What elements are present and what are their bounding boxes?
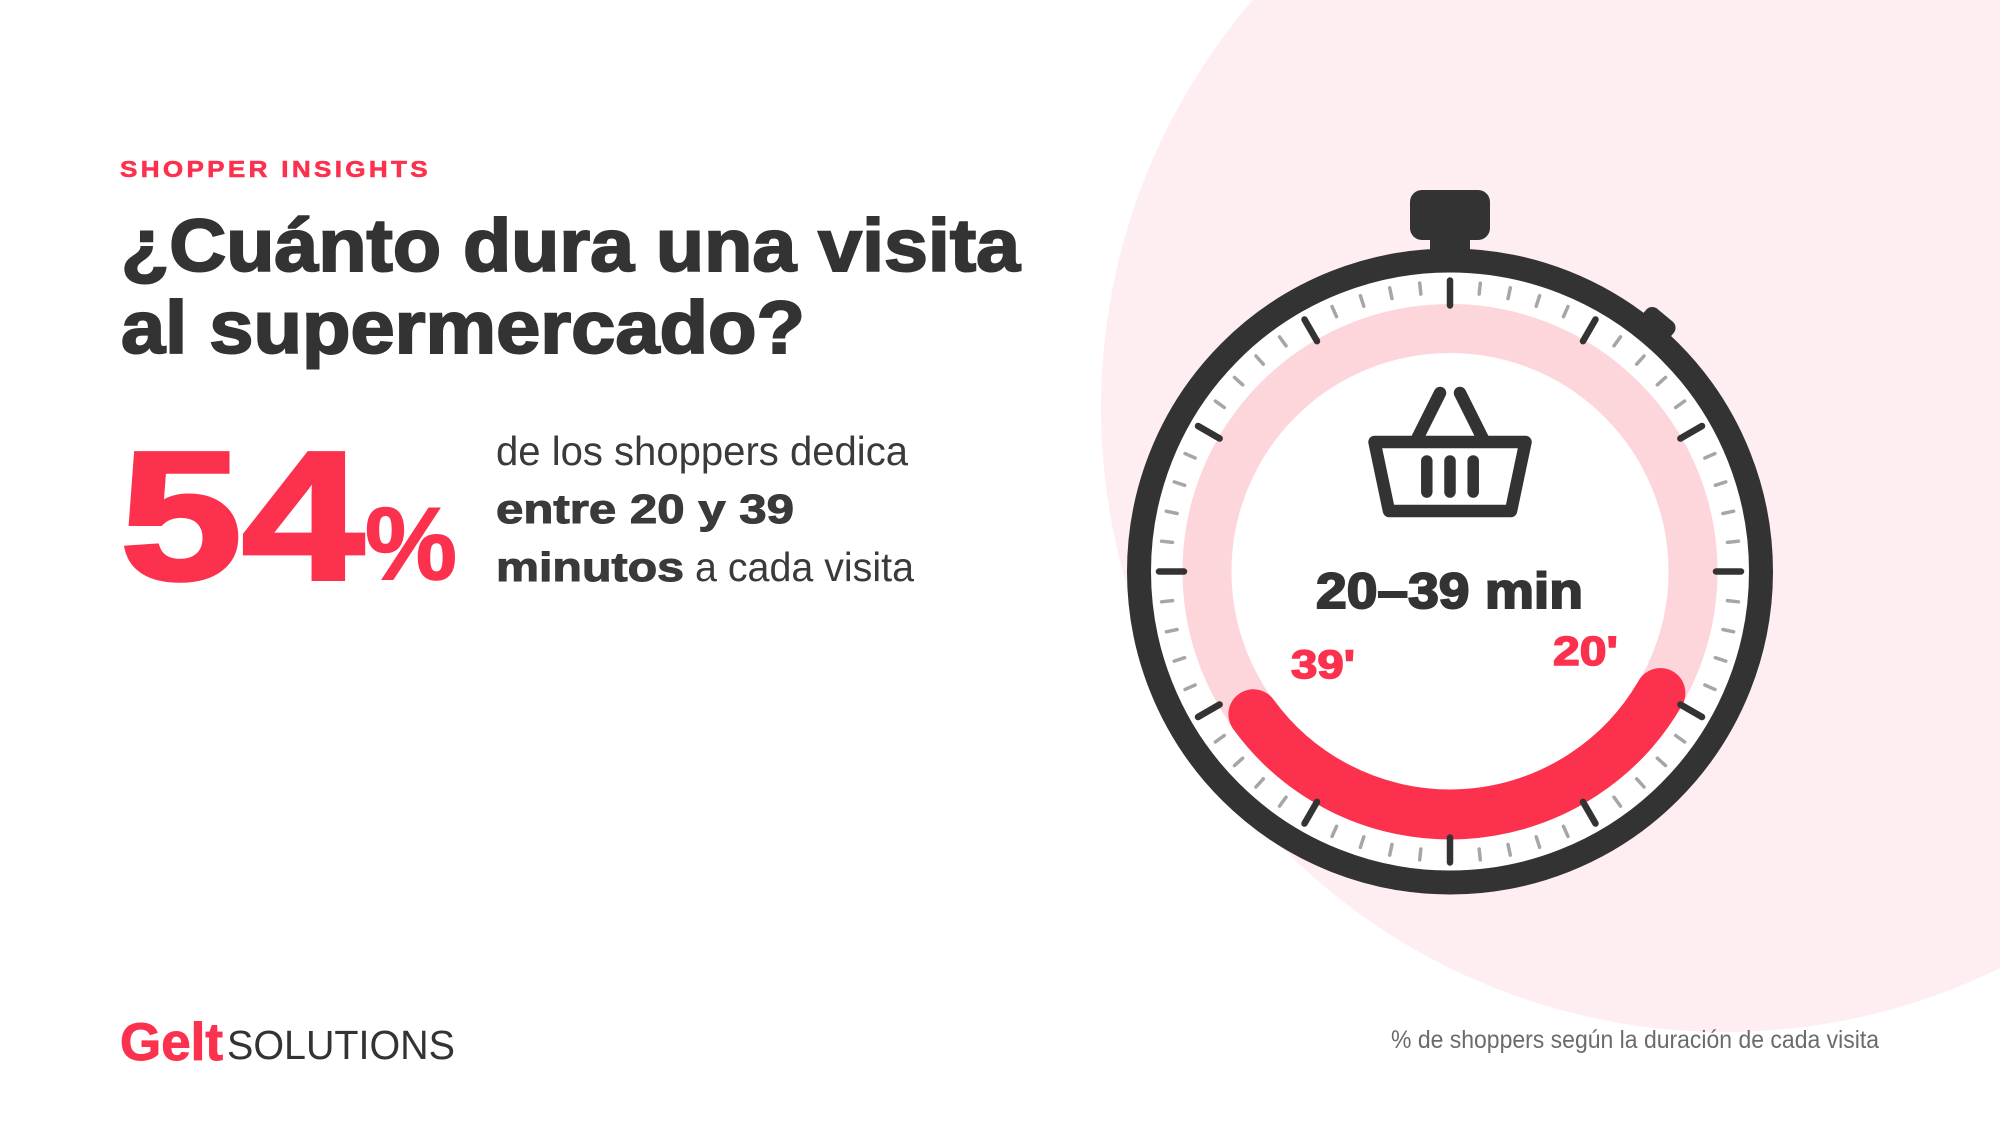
eyebrow: shopper insights: SHOPPER INSIGHTS: [120, 156, 431, 182]
stat description: minutos: [496, 544, 684, 590]
icon: shopping basket: [1374, 393, 1526, 511]
big stat: 54%: 54: [120, 413, 364, 618]
footnote: % de shoppers según la duración de cada visita: [1391, 1026, 1879, 1054]
logo: Gelt Solutions: Gelt: [120, 1013, 223, 1072]
label: 20 minutes: 20': [1553, 628, 1618, 674]
logo: Gelt Solutions: SOLUTIONS: [227, 1022, 455, 1068]
label: 39 minutes: 39': [1291, 643, 1355, 687]
stopwatch case: [1139, 260, 1761, 882]
icon: side button: [1633, 304, 1679, 348]
stat description: entre 20 y 39: [496, 486, 794, 532]
big stat: 54%: [120, 413, 457, 618]
stat description: [496, 428, 914, 590]
logo: Gelt Solutions: [120, 1013, 455, 1072]
title: ¿Cuánto dura una visita: [121, 204, 1021, 287]
highlighted arc 20 to 39 minutes: [1253, 693, 1660, 814]
stat description: de los shoppers dedica: [496, 428, 908, 474]
label: 20–39 min: 20–39 min: [1316, 563, 1583, 619]
stat description: a cada visita: [695, 544, 914, 590]
track ring: [1207, 328, 1693, 814]
stopwatch: [1139, 190, 1761, 882]
background pink circle: [1101, 0, 2000, 1032]
title: al supermercado?: [121, 286, 805, 369]
big stat: 54%: %: [365, 486, 457, 601]
title: [121, 204, 1021, 369]
icon: top crown knob: [1410, 190, 1490, 258]
minute ticks: [1159, 280, 1741, 862]
